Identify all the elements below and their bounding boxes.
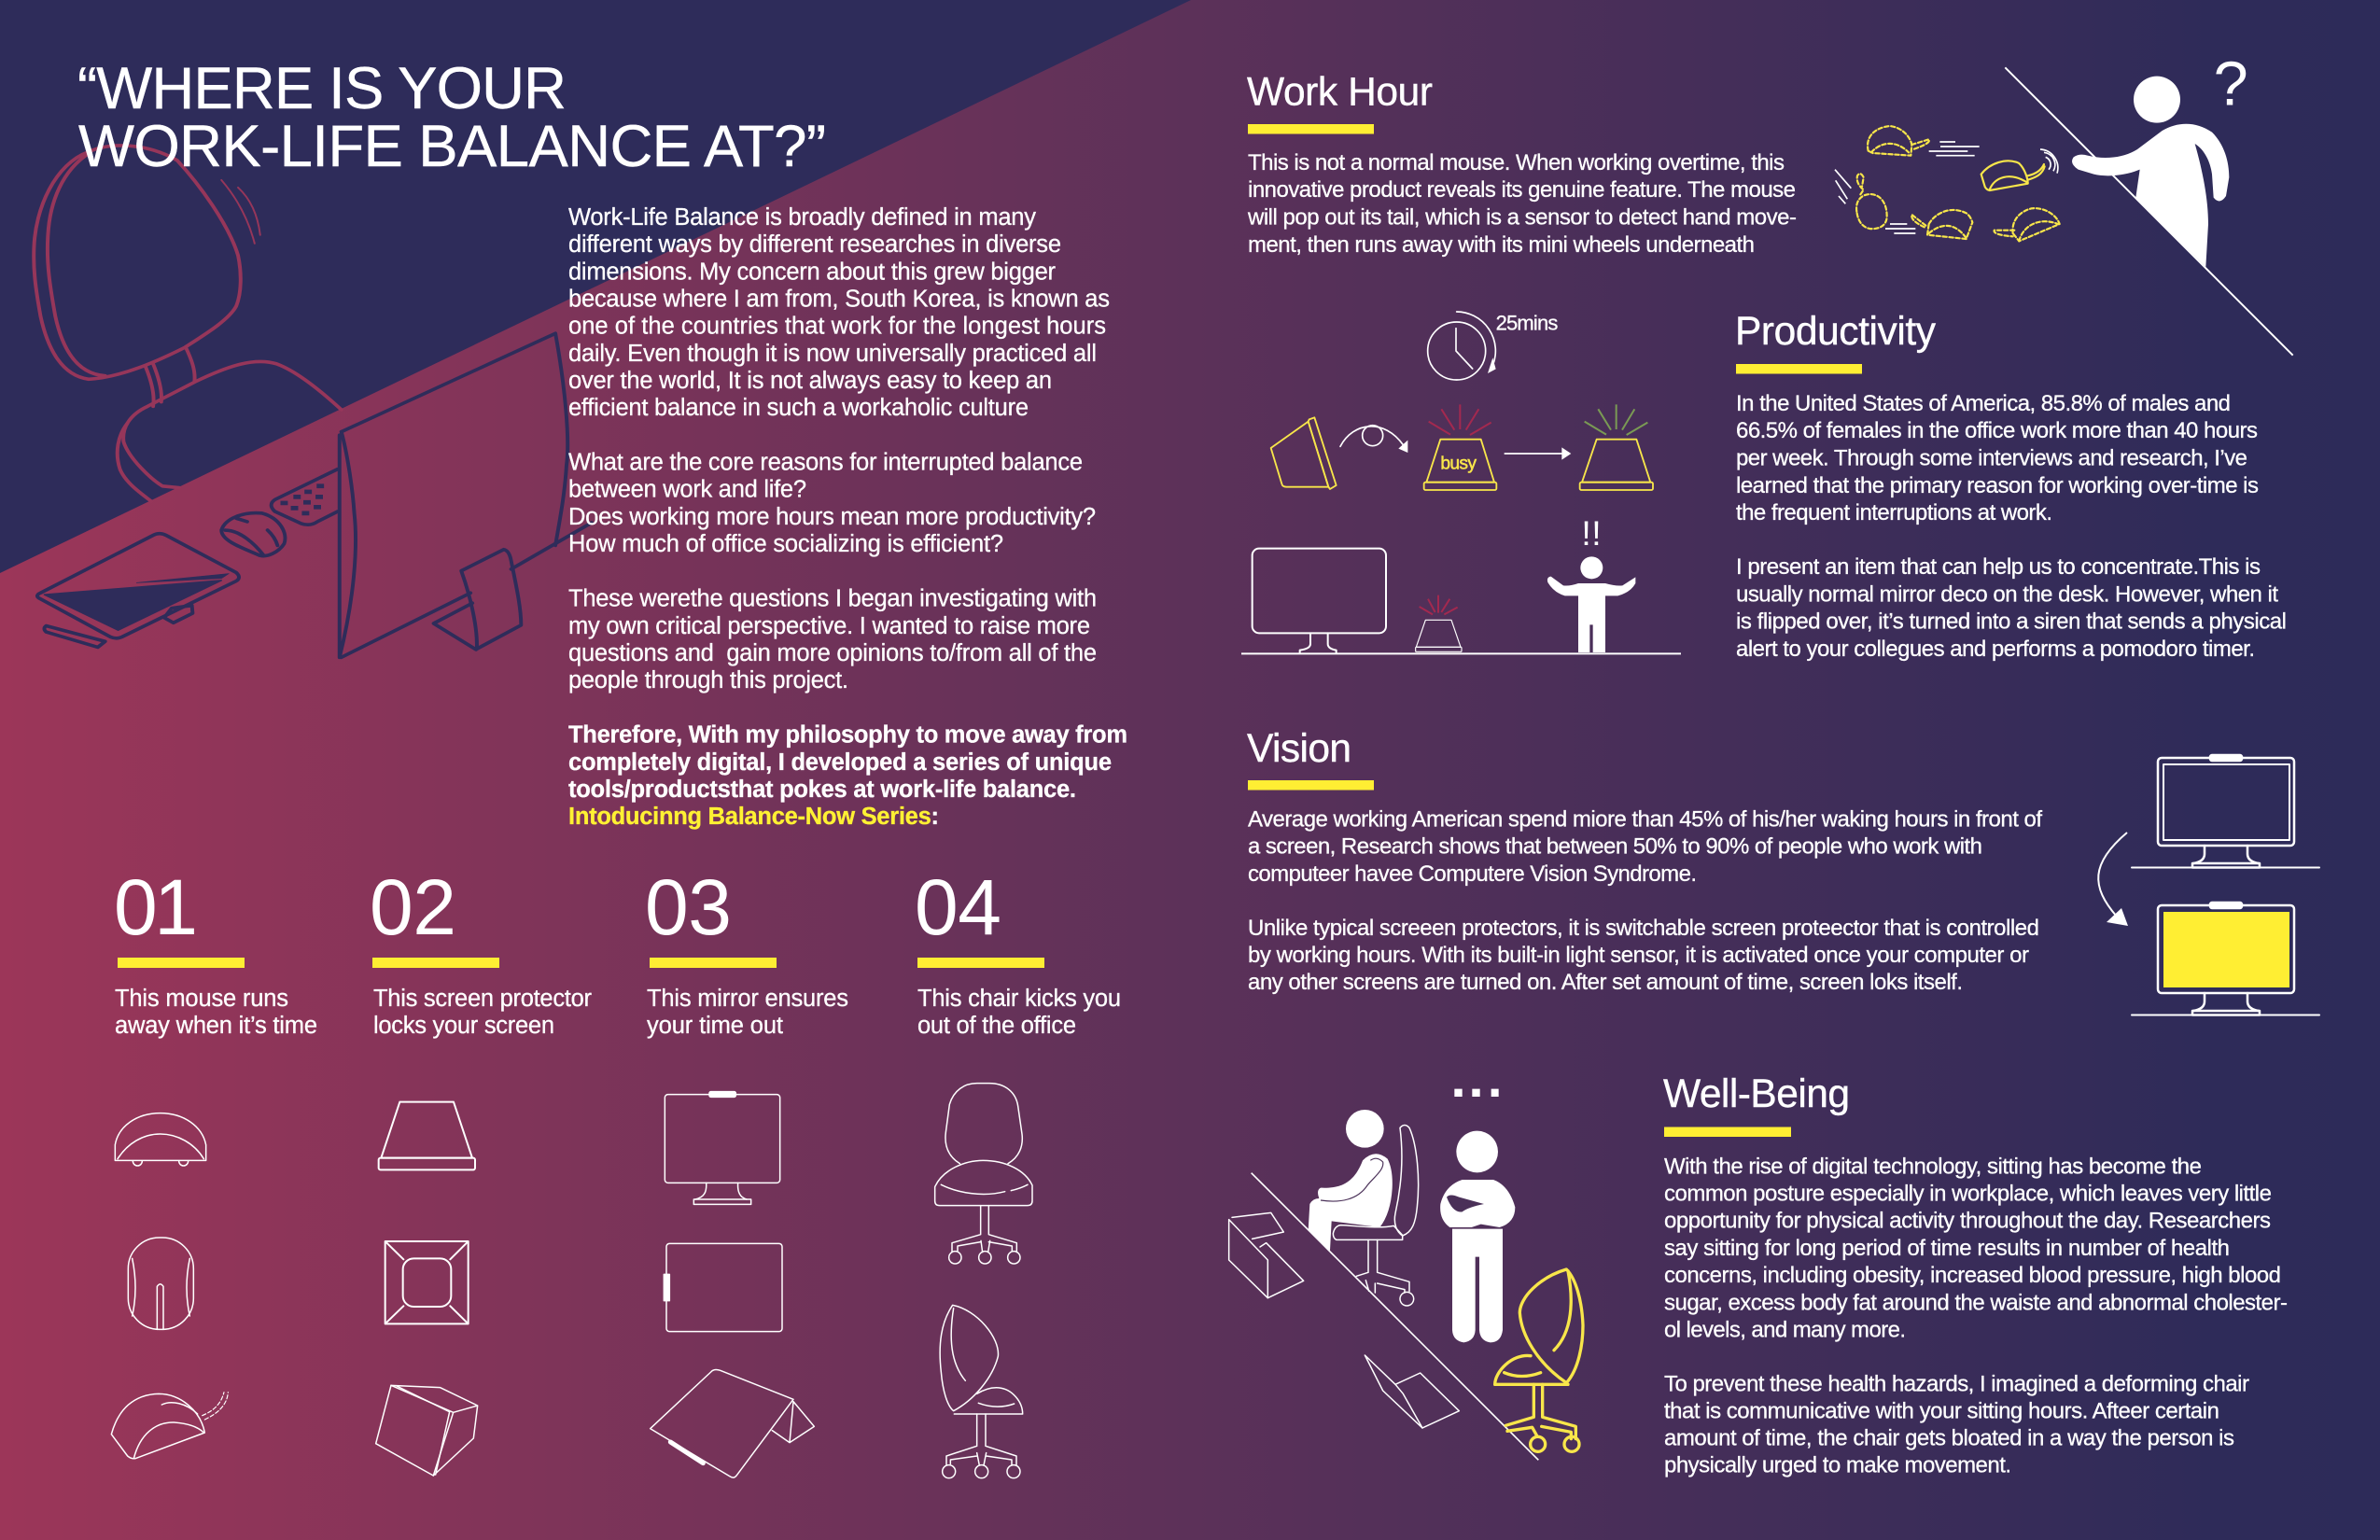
text: Vision body: a screen, Research shows that between 50% to 90% of people who work with: [1248, 834, 1982, 859]
intro text block: people through this project.: [568, 667, 848, 693]
intro text block: Therefore, With my philosophy to move away from: [568, 722, 1127, 749]
text: Well-Being body: common posture especially in workplace, which leaves very little: [1664, 1182, 2272, 1206]
text: Productivity body: the frequent interruptions at work.: [1736, 500, 2052, 525]
icon: mouse top view: [128, 1238, 193, 1329]
illustration: person and running mice: [1835, 50, 2293, 356]
series 04 heading: [915, 863, 1121, 1039]
heading: Vision: [1247, 727, 1374, 790]
busy siren: [1424, 440, 1496, 490]
exclamation marks: !!: [1581, 513, 1602, 553]
intro text block: different ways by different researches in diverse: [568, 231, 1061, 258]
text: Well-Being body: concerns, including obesity, increased blood pressure, high blood: [1664, 1263, 2281, 1288]
intro text block: because where I am from, South Korea, is known as: [568, 286, 1110, 312]
icon: chair side: [940, 1305, 1023, 1478]
standing person arms crossed: [1440, 1131, 1515, 1342]
heading: Productivity: Productivity: [1735, 310, 1937, 354]
series 03 heading: 03: [645, 863, 732, 951]
series 02 heading: This screen protector: [373, 986, 592, 1012]
text: Vision body: by working hours. With its built-in light sensor, it is activated once your computer or: [1248, 943, 2029, 968]
alerted person: [1547, 556, 1635, 652]
chair outline: [34, 146, 342, 501]
icon: screen tilted: [376, 1385, 478, 1476]
intro text block: efficient balance in such a workaholic culture: [568, 395, 1029, 421]
question mark: ?: [2214, 50, 2248, 119]
text: Work Hour body: This is not a normal mouse. When working overtime, this: [1248, 150, 1785, 175]
series 01 heading: This mouse runs: [115, 986, 288, 1012]
text: Work Hour body: ment, then runs away with its mini wheels underneath: [1248, 232, 1755, 258]
intro text block: questions and gain more opinions to/from all of the: [568, 640, 1097, 666]
illustration: screen protector states: [2098, 755, 2319, 1015]
intro text block: Intoducinng Balance-Now Series:: [568, 804, 939, 830]
series 02 heading: 02: [370, 863, 456, 951]
series 04 heading: 04: [915, 863, 1001, 951]
monitor locked yellow: [2132, 903, 2319, 1015]
text: Vision body: Unlike typical screeen protectors, it is switchable screen proteector that is controlled: [1248, 916, 2039, 941]
intro text block: completely digital, I developed a series of unique: [568, 749, 1112, 776]
icon: screen top view: [385, 1241, 469, 1323]
sensor waves: [2040, 149, 2058, 174]
illustration: office chair and desk: [34, 146, 592, 657]
diagonal line: [1252, 1173, 1538, 1460]
desk line: [1241, 651, 1681, 656]
title: [77, 56, 826, 179]
intro text block: between work and life?: [568, 477, 806, 503]
intro text block: How much of office socializing is efficient?: [568, 531, 1003, 557]
title: WORK-LIFE BALANCE AT?”: [78, 114, 826, 179]
illustration: pomodoro siren sequence: busy: [1440, 455, 1477, 474]
intro text block: dimensions. My concern about this grew bigger: [568, 259, 1057, 285]
monitor clear: [2132, 755, 2319, 868]
heading: Well-Being: Well-Being: [1663, 1072, 1850, 1116]
text: Productivity body: per week. Through some interviews and research, I’ve: [1736, 446, 2247, 470]
series 04 heading: This chair kicks you: [917, 986, 1121, 1012]
laptop lower: [1365, 1355, 1459, 1428]
intro text block: [568, 204, 1127, 830]
curved arrow: [2098, 833, 2128, 926]
icons: mirror and chair column: [651, 1084, 1032, 1478]
seated person: [1309, 1110, 1393, 1251]
right arrow: [1505, 451, 1562, 455]
illustration: pomodoro siren sequence: [1241, 311, 1681, 653]
series 03 heading: your time out: [647, 1013, 783, 1039]
text: Productivity body: alert to your collegues and performs a pomodoro timer.: [1736, 637, 2255, 662]
series 01 heading: away when it’s time: [115, 1013, 317, 1039]
free siren: [1580, 440, 1653, 490]
heading: Productivity: [1735, 310, 1937, 373]
series 04 heading: out of the office: [917, 1013, 1076, 1039]
series 01 heading: 01: [114, 863, 198, 951]
speed lines: [1835, 142, 1980, 233]
intro text block: Work-Life Balance is broadly defined in many: [568, 204, 1036, 231]
green siren rays: [1585, 404, 1647, 435]
desk mouse: [221, 513, 285, 556]
title: “WHERE IS YOUR: [77, 56, 567, 121]
heading: Vision: Vision: [1247, 727, 1351, 771]
yellow tilted mirror: [1271, 417, 1337, 489]
icon: chair front: [935, 1084, 1032, 1264]
seated chair: [1333, 1125, 1419, 1306]
ellipsis dots: [1454, 1089, 1499, 1097]
illustration: sitting and standing people: [1229, 1089, 1583, 1460]
desk monitor: [1253, 549, 1386, 653]
text: Productivity body: [1736, 391, 2287, 662]
icons: mouse and siren column: [111, 1102, 478, 1476]
flip arrow: [1340, 426, 1407, 453]
text: Well-Being body: With the rise of digital technology, sitting has become the: [1664, 1154, 2202, 1180]
25mins label: 25mins: [1496, 311, 1558, 334]
text: Productivity body: In the United States of America, 85.8% of males and: [1736, 391, 2231, 416]
text: Well-Being body: that is communicative with your sitting hours. Afteer certain: [1664, 1398, 2219, 1424]
dashed mouse positions: [1856, 126, 2060, 241]
clock with 25 minute arrow: [1428, 312, 1496, 380]
intro text block: one of the countries that work for the longest hours: [568, 314, 1106, 340]
divider line: [2005, 67, 2293, 356]
series 02 heading: [370, 863, 592, 1039]
intro text block: over the world, It is not always easy to keep an: [568, 368, 1052, 394]
text: Well-Being body: amount of time, the chair gets bloated in a way the person is: [1664, 1426, 2234, 1450]
text: Work Hour body: will pop out its tail, which is a sensor to detect hand move-: [1247, 205, 1797, 230]
text: Well-Being body: [1664, 1154, 2288, 1478]
series 02 heading: locks your screen: [373, 1013, 554, 1039]
text: Well-Being body: ol levels, and many more.: [1664, 1318, 1906, 1342]
intro text block: Does working more hours mean more productivity?: [568, 504, 1096, 530]
monitor back and stand: [340, 333, 592, 657]
heading: Well-Being: [1663, 1072, 1850, 1137]
text: Well-Being body: sugar, excess body fat around the waiste and abnormal cholester-: [1664, 1290, 2288, 1316]
series 03 heading: [645, 863, 848, 1039]
text: Vision body: any other screens are turned on. After set amount of time, screen loks itself.: [1248, 970, 1963, 995]
tablet and pen: [37, 534, 239, 647]
intro text block: daily. Even though it is now universally practiced all: [568, 341, 1097, 367]
text: Well-Being body: To prevent these health hazards, I imagined a deforming chair: [1664, 1372, 2249, 1396]
icon: monitor with mirror: [665, 1092, 780, 1204]
person reaching: [2072, 77, 2229, 267]
small siren: [1416, 620, 1462, 651]
icon: mirror folded: [651, 1369, 814, 1477]
yellow mouse with sensor tail: [1981, 161, 2045, 190]
icon: siren: [379, 1102, 475, 1169]
text: Well-Being body: opportunity for physical activity throughout the day. Researchers: [1664, 1208, 2271, 1234]
icon: mouse with tail: [111, 1393, 228, 1459]
red siren rays: [1429, 404, 1491, 435]
text: Vision body: computeer havee Computere Vision Syndrome.: [1248, 861, 1697, 887]
intro text block: What are the core reasons for interrupted balance: [568, 450, 1083, 476]
text: Productivity body: I present an item that can help us to concentrate.This is: [1736, 554, 2261, 580]
series 01 heading: [114, 863, 317, 1039]
text: Productivity body: usually normal mirror deco on the desk. However, when it: [1736, 582, 2278, 607]
intro text block: tools/productsthat pokes at work-life balance.: [568, 777, 1076, 803]
intro text block: my own critical perspective. I wanted to raise more: [568, 613, 1090, 639]
open box upper: [1229, 1212, 1304, 1298]
text: Productivity body: is flipped over, it’s turned into a siren that sends a physical: [1736, 609, 2287, 635]
heading: Work Hour: [1247, 71, 1433, 134]
intro text block: These werethe questions I began investigating with: [568, 586, 1097, 612]
text: Vision body: Average working American spend miore than 45% of his/her waking hours in front of: [1248, 806, 2042, 833]
icon: mouse side view: [115, 1113, 206, 1166]
series 03 heading: This mirror ensures: [647, 986, 848, 1012]
icon: mirror front: [664, 1243, 782, 1332]
text: Work Hour body: innovative product reveals its genuine feature. The mouse: [1248, 177, 1796, 203]
text: Well-Being body: say sitting for long period of time results in number of health: [1664, 1236, 2230, 1261]
text: Vision body: [1248, 806, 2042, 995]
yellow bloated chair: [1495, 1269, 1583, 1451]
text: Productivity body: 66.5% of females in the office work more than 40 hours: [1736, 418, 2258, 443]
keyboard: [272, 469, 338, 525]
heading: Work Hour: Work Hour: [1247, 71, 1433, 114]
text: Productivity body: learned that the primary reason for working over-time is: [1736, 473, 2259, 498]
text: Work Hour body: [1247, 150, 1797, 258]
text: Well-Being body: physically urged to make movement.: [1664, 1452, 2011, 1478]
